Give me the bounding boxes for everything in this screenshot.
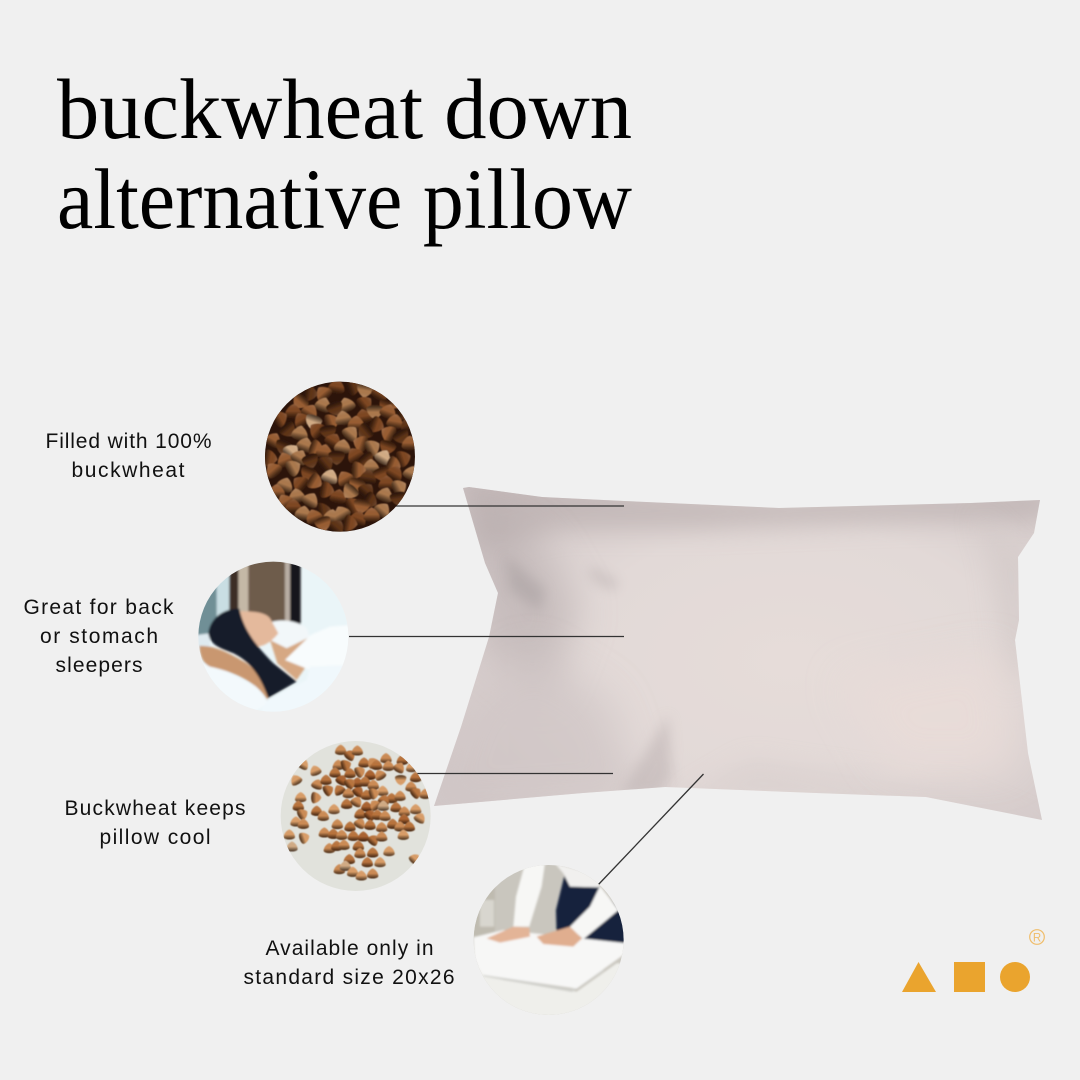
title: alternative pillow [57,151,632,247]
label: Great for back or stomach sleepers [24,596,174,677]
label: Great for back or stomach sleepers: or stomach [40,625,158,648]
label: Filled with 100% buckwheat: buckwheat [72,459,185,482]
photo: hands pressing pillow [473,863,627,1017]
label: Filled with 100% buckwheat [46,430,212,482]
label: Great for back or stomach sleepers: Great for back [24,596,174,619]
label: Buckwheat keeps pillow cool: pillow cool [100,826,210,849]
photo: woman sleeping [197,560,350,713]
pillow photo [425,475,1050,830]
label: Available only in standard size 20x26: Available only in [266,937,434,960]
label: Filled with 100% buckwheat: Filled with 100% [46,430,212,453]
label: Available only in standard size 20x26: standard size 20x26 [244,966,454,989]
connector lines [349,506,704,885]
photo: buckwheat groats [264,382,415,532]
label: Available only in standard size 20x26 [244,937,454,989]
title: buckwheat down [57,61,632,157]
label: Buckwheat keeps pillow cool [64,797,246,849]
photo: scattered buckwheat [280,740,433,893]
label: Great for back or stomach sleepers: sleepers [56,654,142,677]
title [57,61,632,247]
logo: triangle, square, circle [902,930,1044,992]
label: Buckwheat keeps pillow cool: Buckwheat keeps [64,797,246,820]
logo: triangle, square, circle: R [1033,932,1041,944]
